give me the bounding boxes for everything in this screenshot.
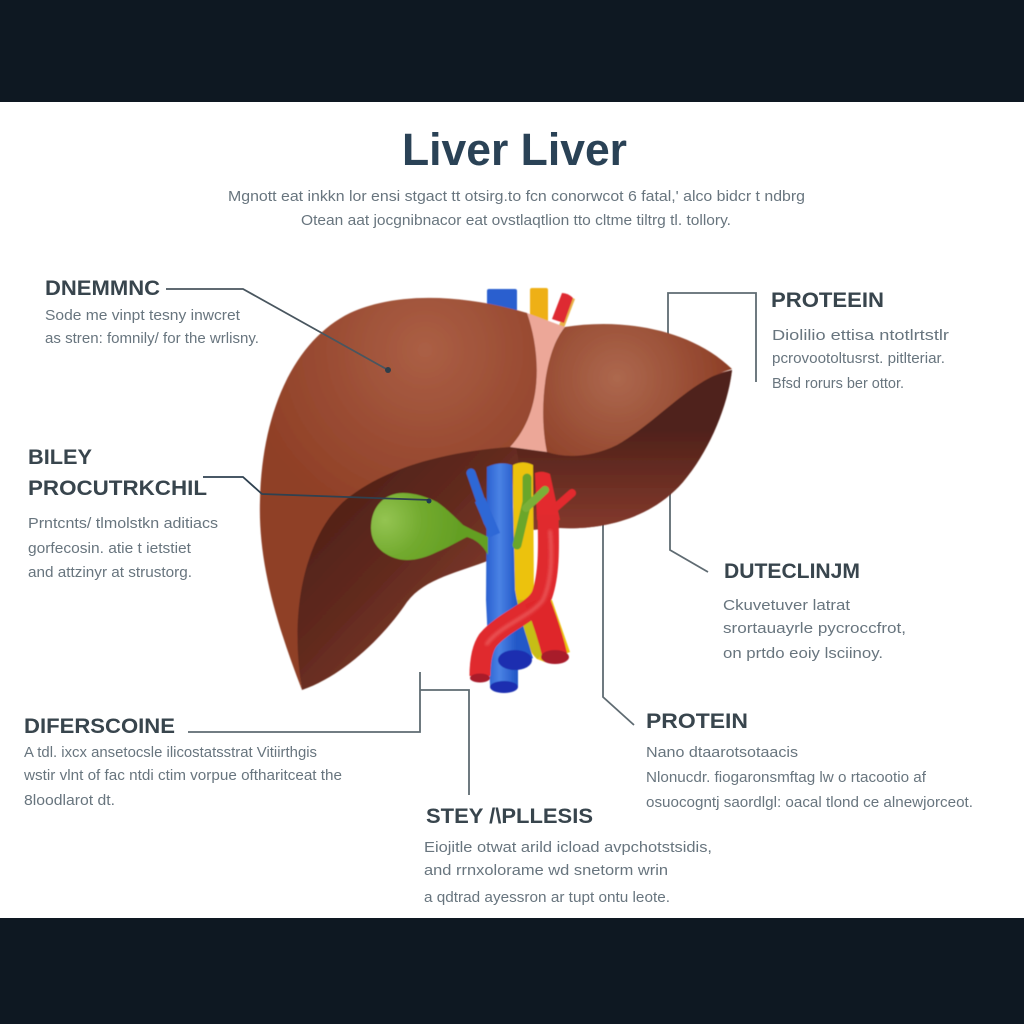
- leader line: [188, 672, 420, 732]
- description: Bfsd rorurs ber ottor.: [772, 375, 904, 392]
- description: a qdtrad ayessron ar tupt ontu leote.: [424, 889, 670, 906]
- description: Sode me vinpt tesny inwcret: [45, 307, 241, 324]
- description: [28, 515, 218, 581]
- description: Ckuvetuver latrat: [723, 597, 851, 614]
- description: Nlonucdr. fiogaronsmftag lw o rtacootio af: [646, 769, 927, 786]
- subtitle: [228, 188, 805, 229]
- description: gorfecosin. atie t ietstiet: [28, 540, 192, 557]
- description: A tdl. ixcx ansetocsle ilicostatsstrat Vitiirthgis: [24, 744, 317, 761]
- heading: PROTEEIN: [771, 289, 884, 312]
- leader line: [203, 477, 430, 500]
- callout: middle right: [723, 560, 906, 662]
- callout: top left: [45, 277, 391, 373]
- description: [723, 597, 906, 662]
- description: wstir vlnt of fac ntdi ctim vorpue oftharitceat the: [23, 767, 342, 784]
- description: srortauayrle pycroccfrot,: [723, 620, 906, 637]
- hepatic artery red: [470, 472, 572, 682]
- heading: BILEY: [28, 446, 92, 469]
- heading: STEY /\PLLESIS: [426, 805, 593, 828]
- right underside shade: [515, 370, 732, 530]
- white panel: [0, 102, 1024, 918]
- description: [23, 744, 342, 809]
- callout: top right: [771, 289, 949, 392]
- description: [45, 307, 259, 347]
- description: Diolilio ettisa ntotlrtstlr: [772, 327, 949, 344]
- callout: bottom centre: [420, 690, 712, 906]
- callout leader lines behind liver: [603, 293, 756, 725]
- callout: middle left: [28, 446, 432, 581]
- callout: lower left: [23, 672, 420, 809]
- heading: [28, 446, 207, 500]
- description: Nano dtaarotsotaacis: [646, 744, 798, 761]
- description: osuocogntj saordlgl: oacal tlond ce alnewjorceot.: [646, 794, 973, 811]
- vessel stubs above the liver: [487, 288, 575, 328]
- right lobe: [543, 324, 732, 456]
- bottom dark band: [0, 918, 1024, 1024]
- falciform ligament: [510, 313, 565, 452]
- description: Eiojitle otwat arild icload avpchotstsidis,: [424, 839, 712, 856]
- yellow duct: [512, 462, 570, 662]
- portal vein blue: [471, 463, 533, 693]
- subtitle: Otean aat jocgnibnacor eat ovstlaqtlion tto cltme tiltrg tl. tollory.: [301, 212, 731, 229]
- leader dot: [385, 367, 391, 373]
- description: pcrovootoltusrst. pitlteriar.: [772, 350, 945, 367]
- vessel openings: [498, 650, 532, 670]
- description: [424, 839, 712, 906]
- description: as stren: fomnily/ for the wrlisny.: [45, 330, 259, 347]
- description: Prntcnts/ tlmolstkn aditiacs: [28, 515, 218, 532]
- artery openings: [541, 650, 569, 664]
- leader line: [420, 690, 469, 795]
- heading: PROTEIN: [646, 710, 748, 733]
- heading: DUTECLINJM: [724, 560, 860, 583]
- leader line: [166, 289, 388, 370]
- liver illustration: [260, 288, 732, 693]
- liver underside: [270, 370, 732, 690]
- description: and attzinyr at strustorg.: [28, 564, 192, 581]
- green bile duct and gallbladder: [371, 478, 545, 560]
- heading: DNEMMNC: [45, 277, 160, 300]
- heading: PROCUTRKCHIL: [28, 477, 207, 500]
- title: Liver Liver: [402, 124, 627, 175]
- heading: DIFERSCOINE: [24, 715, 175, 738]
- leader dot: [426, 498, 432, 504]
- description: and rrnxolorame wd snetorm wrin: [424, 862, 668, 879]
- description: [646, 744, 973, 811]
- callout: lower right: [646, 710, 973, 811]
- top dark band: [0, 0, 1024, 102]
- description: on prtdo eoiy lsciinoy.: [723, 645, 883, 662]
- description: 8loodlarot dt.: [24, 792, 115, 809]
- left lobe: [260, 298, 537, 690]
- description: [772, 327, 949, 392]
- subtitle: Mgnott eat inkkn lor ensi stgact tt otsirg.to fcn conorwcot 6 fatal,' alco bidcr t ndbrg: [228, 188, 805, 205]
